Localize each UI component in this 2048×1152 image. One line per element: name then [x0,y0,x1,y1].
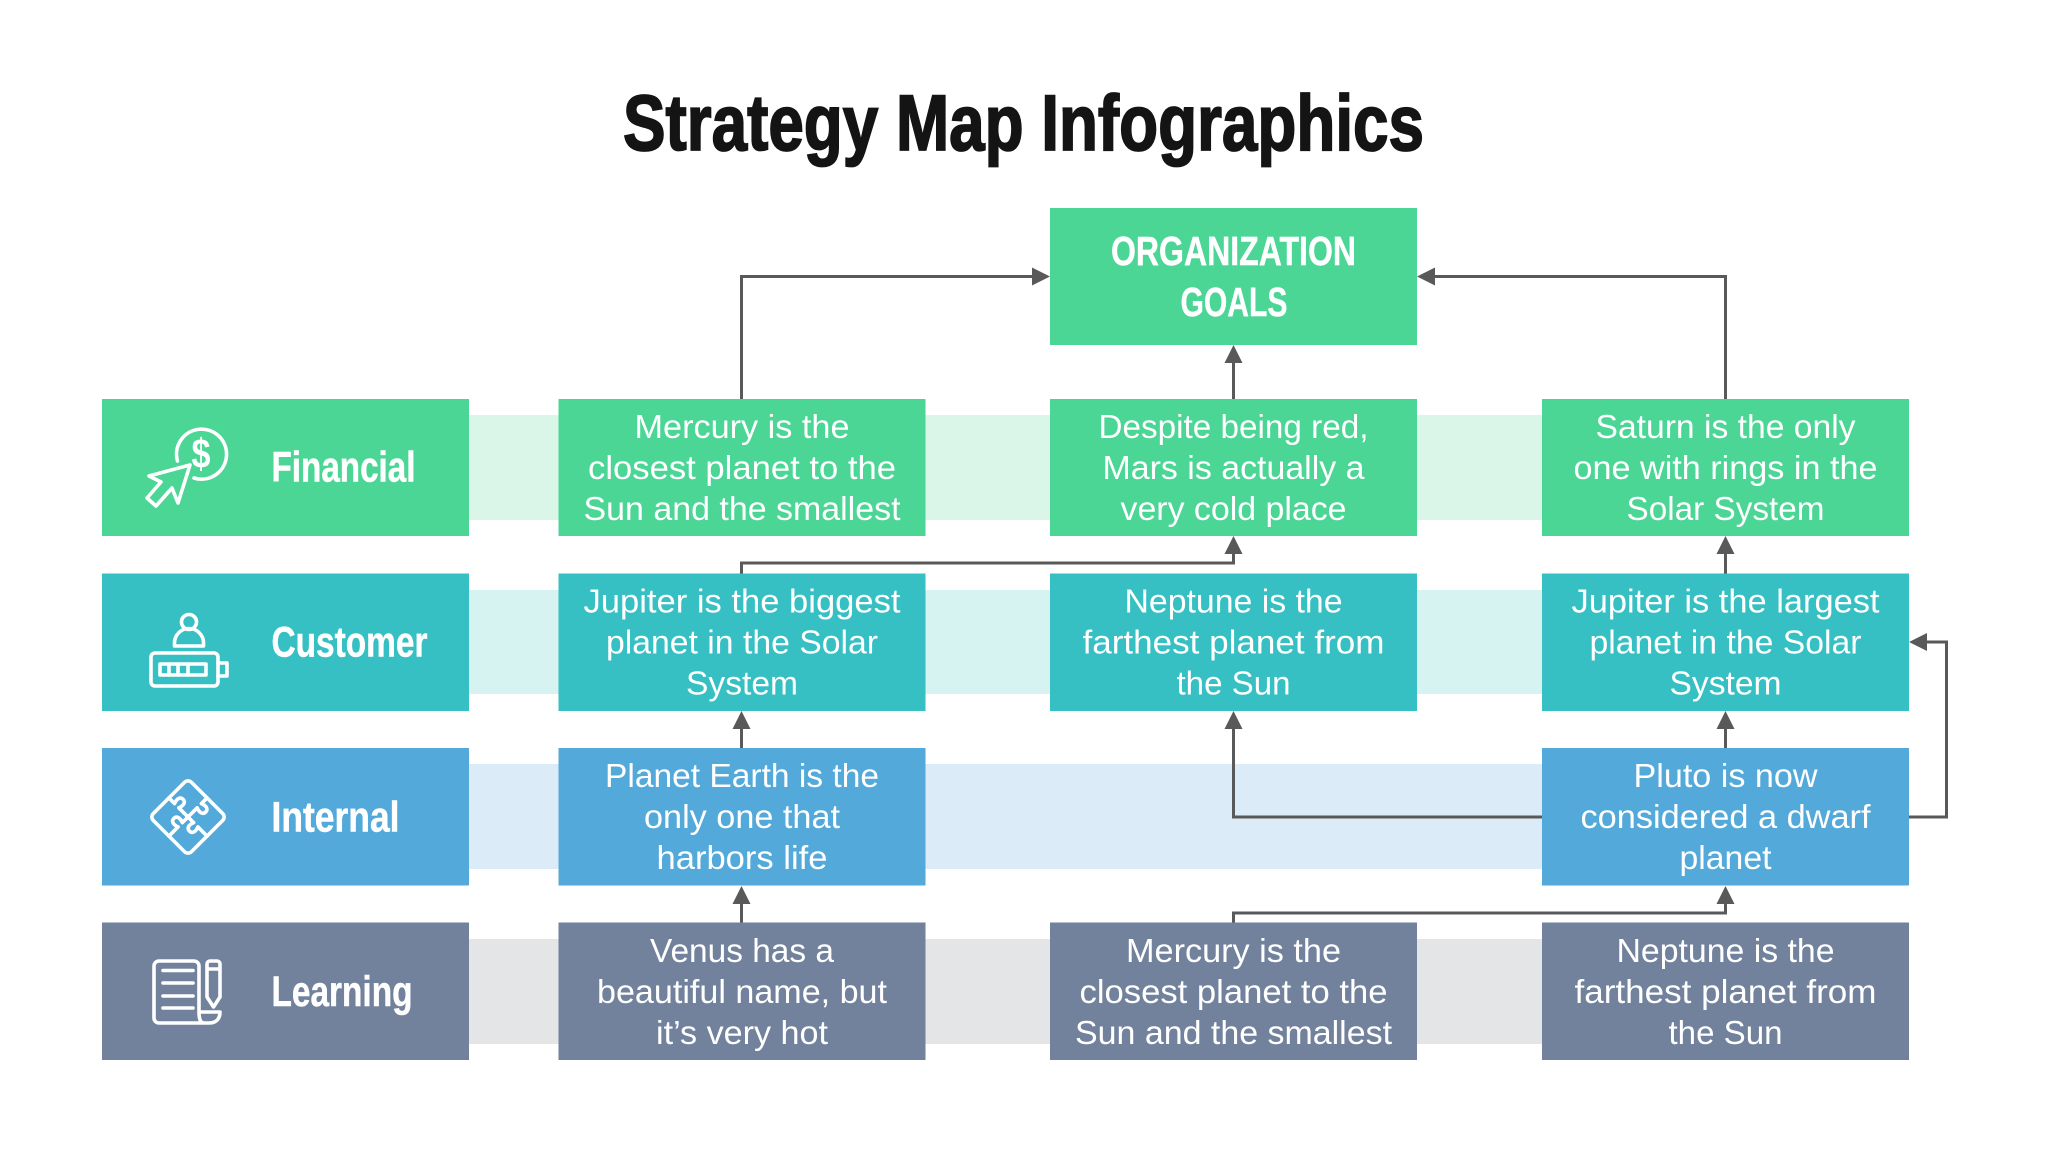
customer: Jupiter largest box [1542,574,1909,711]
customer: Neptune box [1050,574,1417,711]
box: organization goals [1050,208,1417,345]
customer: Neptune box: farthest planet from [1082,624,1384,660]
band: learning [469,939,1542,1044]
internal: Pluto box: considered a dwarf [1580,798,1871,835]
row label: internal [102,748,469,886]
customer: Jupiter box: Jupiter is the biggest [584,582,900,620]
financial: Saturn box: Solar System [1626,490,1824,527]
arrow: Mars to organization goals [1224,345,1242,399]
learning: Mercury box: closest planet to the [1080,973,1388,1010]
customer: Jupiter largest box: System [1670,664,1782,702]
internal: Pluto box: planet [1680,839,1772,876]
arrow: Jupiter to Mars [742,536,1242,574]
row label: customer [102,574,469,711]
row label: learning [102,922,469,1060]
arrow: Venus to Earth [732,886,750,923]
learning: Mercury box: Sun and the smallest [1075,1014,1392,1051]
financial: Saturn box: Saturn is the only [1596,408,1856,445]
learning: Neptune box: farthest planet from [1574,973,1876,1010]
icon: customer with battery [151,614,227,686]
financial: Mercury box: closest planet to the [588,449,896,486]
financial: Saturn box [1542,399,1909,536]
learning: Neptune box: Neptune is the [1616,932,1834,969]
financial: Mars box [1050,399,1417,536]
arrow: Mercury to Pluto [1234,886,1734,923]
customer: Jupiter largest box: Jupiter is the largest [1572,582,1880,620]
financial: Mars box: very cold place [1120,490,1346,527]
row label: learning: Learning [272,968,412,1016]
title: Strategy Map Infographics [623,78,1424,167]
learning: Mercury box [1050,922,1417,1060]
customer: Jupiter box: planet in the Solar [606,624,878,660]
row label: financial [102,399,469,536]
arrow: Pluto loop to Jupiter [1909,633,1946,817]
learning: Neptune box [1542,922,1909,1060]
internal: Earth box: harbors life [656,839,828,876]
row label: financial: Financial [272,444,416,492]
icon: cursor on dollar coin: $ [192,430,210,477]
financial: Mercury box [558,399,926,536]
arrow: Pluto to Neptune [1224,711,1542,817]
arrow: Mercury to organization goals [742,268,1050,399]
row label: customer: Customer [272,618,428,666]
customer: Jupiter box: System [686,664,798,702]
learning: Venus box [558,922,926,1060]
arrow: Saturn to organization goals [1417,268,1726,399]
internal: Earth box: Planet Earth is the [605,757,879,794]
customer: Neptune box: Neptune is the [1124,582,1342,620]
learning: Venus box: Venus has a [650,932,835,969]
internal: Pluto box [1542,748,1909,886]
financial: Mercury box: Mercury is the [634,408,850,445]
arrow: Jupiter to Saturn [1716,536,1734,574]
box: organization goals: ORGANIZATION [1111,228,1356,274]
connector arrows [732,268,1946,923]
internal: Earth box: only one that [644,798,840,835]
customer: Jupiter largest box: planet in the Solar [1590,624,1862,660]
learning: Mercury box: Mercury is the [1126,932,1341,969]
customer: Jupiter box [558,574,926,711]
arrow: Pluto to Jupiter [1716,711,1734,748]
learning: Neptune box: the Sun [1668,1014,1782,1051]
learning: Venus box: beautiful name, but [597,973,887,1010]
internal: Earth box [558,748,926,886]
financial: Mercury box: Sun and the smallest [584,490,900,527]
box: organization goals: GOALS [1180,279,1288,325]
financial: Mars box: Despite being red, [1098,408,1368,445]
band: financial [469,415,1542,520]
internal: Pluto box: Pluto is now [1634,757,1818,794]
arrow: Earth to Jupiter [732,711,750,748]
customer: Neptune box: the Sun [1176,664,1290,702]
row label: internal: Internal [272,794,400,842]
band: internal [469,764,1542,869]
icon: puzzle diamond [150,779,226,855]
icon: notebook and pencil [154,961,220,1023]
financial: Saturn box: one with rings in the [1574,449,1878,486]
financial: Mars box: Mars is actually a [1102,449,1365,486]
icon: cursor on dollar coin [147,429,227,506]
learning: Venus box: it’s very hot [656,1014,828,1051]
band: customer [469,590,1542,694]
